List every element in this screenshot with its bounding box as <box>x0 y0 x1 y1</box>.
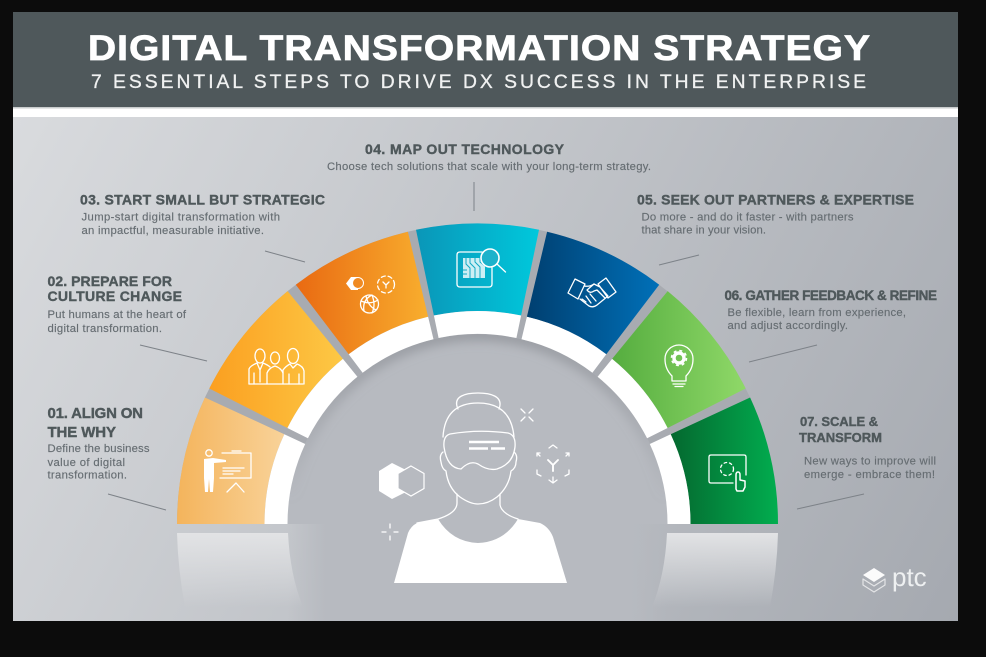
icon: dashed target frame <box>537 445 569 483</box>
icon: team <box>249 348 304 384</box>
step 02 text <box>48 273 207 361</box>
icon: chip and magnifier <box>457 249 506 287</box>
icon: hexagons, target, globe <box>346 276 394 313</box>
logo: ptc <box>863 562 927 592</box>
segment 02 <box>209 291 357 438</box>
step 03 text <box>80 192 325 262</box>
step 05 text: that share in your vision. <box>642 224 766 236</box>
title: DIGITAL TRANSFORMATION STRATEGY <box>88 29 871 68</box>
icon: light bulb <box>665 345 693 386</box>
step 07 text: New ways to improve will <box>804 456 936 468</box>
leader line <box>797 494 864 509</box>
step 04 text <box>327 141 651 211</box>
step 03 text: Jump-start digital transformation with <box>82 212 280 224</box>
segment 01 <box>177 398 305 524</box>
leader line <box>140 345 207 361</box>
subtitle: 7 ESSENTIAL STEPS TO DRIVE DX SUCCESS IN THE ENTERPRISE <box>91 71 869 93</box>
step 01 text: transformation. <box>48 470 127 482</box>
step 02 text: 02. PREPARE FOR <box>48 273 172 289</box>
center floor <box>288 524 667 621</box>
figure: person wearing VR headset <box>394 393 567 583</box>
step 01 text: THE WHY <box>48 424 116 441</box>
step 05 text: 05. SEEK OUT PARTNERS & EXPERTISE <box>637 192 914 208</box>
step 04 text: 04. MAP OUT TECHNOLOGY <box>365 141 565 157</box>
step 01 text: value of digital <box>48 457 125 469</box>
step 06 text <box>724 288 937 362</box>
step 07 text: emerge - embrace them! <box>804 469 935 481</box>
step 03 text: 03. START SMALL BUT STRATEGIC <box>80 192 325 208</box>
step 06 text: Be flexible, learn from experience, <box>728 307 906 319</box>
step 05 text <box>637 192 914 265</box>
panel background <box>13 117 958 621</box>
semicircle arc backing <box>177 223 778 524</box>
step 07 text: TRANSFORM <box>799 430 882 445</box>
segment 05 <box>522 232 659 373</box>
center core <box>288 334 668 524</box>
step 01 text: 01. ALIGN ON <box>48 405 143 422</box>
segment 07 <box>650 398 778 524</box>
step 02 text: CULTURE CHANGE <box>48 288 182 304</box>
visor display lines <box>469 442 505 448</box>
step 01 text <box>48 405 166 510</box>
leader line <box>265 251 305 262</box>
segment 06 <box>598 291 746 438</box>
header banner <box>13 12 958 117</box>
icon: sparkle <box>382 524 398 540</box>
step 07 text: 07. SCALE & <box>800 414 878 429</box>
leader line <box>108 494 166 510</box>
step 06 text: and adjust accordingly. <box>728 320 848 332</box>
step 02 text: digital transformation. <box>48 323 162 335</box>
step 05 text: Do more - and do it faster - with partners <box>642 212 854 224</box>
pedestal reflections <box>177 533 778 607</box>
segment 03 <box>296 232 434 373</box>
step 04 text: Choose tech solutions that scale with your long-term strategy. <box>327 161 651 173</box>
icon: presenter <box>204 450 251 492</box>
icon: touch tablet <box>709 455 746 491</box>
step 07 text <box>797 414 936 509</box>
icon: handshake <box>568 278 616 307</box>
step 03 text: an impactful, measurable initiative. <box>82 225 264 237</box>
segment 04 <box>416 223 539 338</box>
leader line <box>749 345 817 362</box>
leader line <box>659 255 699 265</box>
step 06 text: 06. GATHER FEEDBACK & REFINE <box>724 288 937 303</box>
step 01 text: Define the business <box>48 443 150 455</box>
logo: ptc: ptc <box>892 562 927 592</box>
leader line <box>473 182 475 211</box>
icon: corner marks <box>521 409 533 421</box>
icon: hexagons <box>379 463 424 499</box>
step 02 text: Put humans at the heart of <box>48 309 187 321</box>
